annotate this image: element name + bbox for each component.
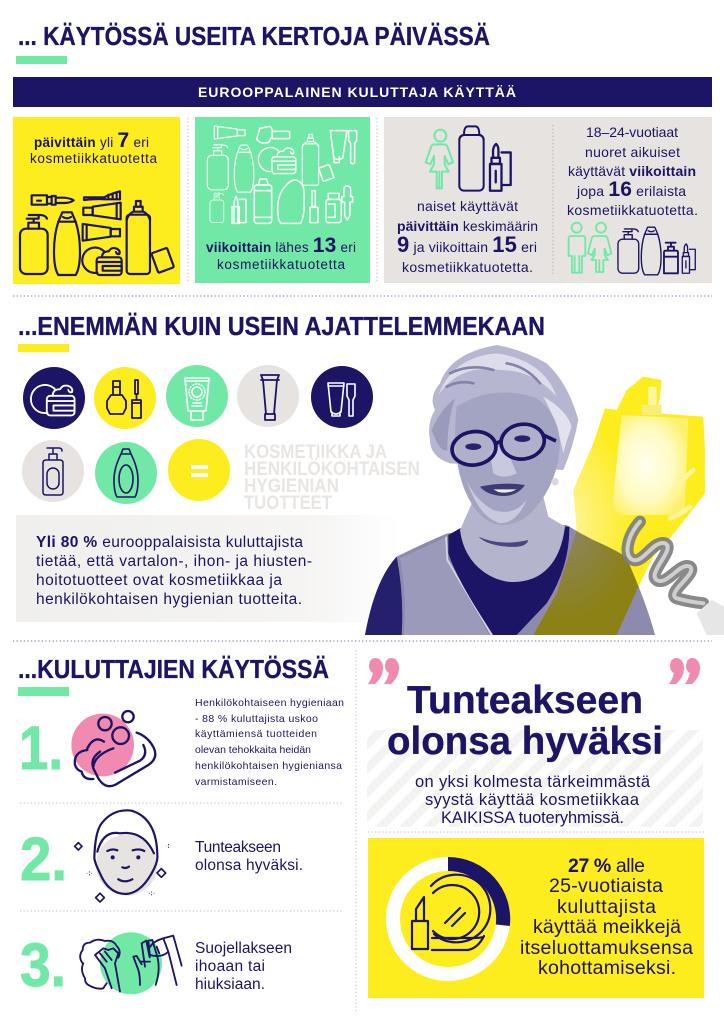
icon: nail polish [94, 367, 156, 429]
panel text: weekly 13 [206, 234, 356, 272]
panel text: daily 7 [30, 129, 157, 166]
panel text: 27 percent: käyttää meikkejä [533, 916, 681, 938]
icon circles row 1 [23, 365, 373, 429]
icon: tube [237, 365, 299, 427]
panel text: women: päivittäin keskimäärin [397, 218, 538, 234]
quote heading: Tunteakseen [407, 679, 643, 722]
panel: women and young adults [384, 117, 712, 283]
panel text: young adults: 18–24-vuotiaat [586, 124, 678, 140]
panel text: women [397, 198, 538, 275]
panel text: women: 9 ja viikoittain 15 eri [397, 232, 537, 257]
panel text: 27 percent: 25-vuotiaista [549, 875, 663, 897]
description 1: olevan tehokkaita heidän [195, 744, 311, 756]
quote text: on yksi kolmesta tärkeimmästä [415, 773, 651, 791]
panel text: daily 7: kosmetiikkatuotetta [30, 151, 157, 166]
striped background [367, 730, 703, 827]
heading accent bar [18, 344, 69, 352]
gray label: cosmetics and personal hygiene products [244, 441, 420, 514]
panel text: 27 percent: 27 % alle [568, 855, 645, 877]
gray label: cosmetics and personal hygiene products: HENKILÖKOHTAISEN [244, 457, 420, 480]
panel text: young adults: nuoret aikuiset [585, 144, 680, 160]
number 3: 3. [20, 931, 66, 999]
gray label: cosmetics and personal hygiene products: HYGIENIAN [244, 475, 339, 497]
quote heading [387, 679, 663, 763]
icon: cream jar [23, 367, 85, 429]
title: ... KÄYTÖSSÄ USEITA KERTOJA PÄIVÄSSÄ [18, 22, 490, 51]
description 2: Tunteakseen [195, 839, 281, 856]
icons: woman with products [426, 126, 511, 191]
gray label: cosmetics and personal hygiene products: KOSMETIIKKA JA [244, 441, 387, 463]
description 3: ihoaan tai [195, 958, 265, 975]
callout: 80 percent: hoitotuotteet ovat kosmetiikkaa ja [36, 572, 282, 589]
panel text: young adults: käyttävät viikoittain [568, 163, 696, 179]
panel text: 27 percent: kohottamiseksi. [538, 957, 676, 979]
panel: weekly products green [195, 117, 370, 283]
icon: equals sign [168, 439, 230, 501]
banner [13, 77, 712, 107]
panel text: women: kosmetiikkatuotetta. [402, 259, 533, 275]
icon: sunscreen [166, 365, 228, 427]
item 1: personal hygiene [19, 697, 344, 788]
divider [187, 118, 189, 283]
perfume bottle [613, 415, 688, 515]
icon: soap and bubbles [71, 711, 155, 786]
panel text: 27 percent: kuluttajista [557, 896, 656, 918]
quote mark left [368, 658, 399, 684]
description 1: - 88 % kuluttajista uskoo [195, 713, 318, 725]
description 3 [195, 940, 292, 993]
icons: daily cosmetics [20, 191, 174, 275]
callout: 80 percent: tietää, että vartalon-, ihon- ja hiusten- [36, 553, 312, 570]
quote mark right [669, 658, 700, 684]
item 3: protect [20, 931, 292, 999]
panel: daily products yellow [13, 117, 180, 284]
icons: young people with products [569, 223, 695, 275]
description 1: Henkilökohtaiseen hygieniaan [195, 697, 344, 709]
description 1 [195, 697, 344, 788]
divider [13, 640, 712, 642]
panel: 27 percent [368, 838, 704, 998]
donut chart with makeup icon [393, 857, 510, 974]
item 2: feel good [20, 810, 303, 902]
description 3: hiuksiaan. [195, 976, 265, 993]
panel text: 27 percent [520, 855, 693, 979]
icons: weekly cosmetics [207, 126, 357, 223]
panel text: young adults: kosmetiikkatuotetta. [567, 202, 698, 218]
callout: 80 percent [16, 515, 400, 622]
icon: shampoo bottle [95, 442, 157, 504]
quote text [415, 773, 651, 827]
face [455, 392, 560, 525]
callout: 80 percent: henkilökohtaisen hygienian tuotteita. [36, 591, 302, 608]
description 2: olonsa hyväksi. [195, 857, 303, 874]
banner: EUROOPPALAINEN KULUTTAJA KÄYTTÄÄ [198, 84, 516, 100]
quote text: syystä käyttää kosmetiikkaa [425, 791, 640, 809]
heading accent bar [18, 687, 69, 696]
title accent bar [16, 56, 67, 64]
number 2: 2. [20, 825, 67, 893]
panel text: young adults: jopa 16 erilaista [576, 178, 686, 201]
section heading 3: ...KULUTTAJIEN KÄYTÖSSÄ [18, 655, 329, 684]
number 1: 1. [19, 714, 63, 782]
photo: woman with perfume and toothpaste [365, 345, 724, 635]
glasses [450, 421, 556, 468]
icon: toothpaste and toothbrush [311, 366, 373, 428]
panel text: young adults [567, 124, 698, 218]
panel text: weekly 13: kosmetiikkatuotetta [217, 257, 345, 272]
panel text: women: naiset käyttävät [417, 198, 518, 214]
toothpaste squiggle [627, 522, 703, 603]
hair [429, 345, 578, 470]
callout: 80 percent: Yli 80 % eurooppalaisista kuluttajista [36, 534, 303, 551]
panel text: daily 7: päivittäin yli 7 eri [34, 129, 149, 152]
sweater [365, 525, 655, 635]
panel text: 27 percent: itseluottamuksensa [520, 937, 693, 959]
divider [13, 295, 712, 297]
quote panel [367, 658, 703, 827]
quote heading: olonsa hyväksi [387, 720, 663, 763]
divider [376, 118, 378, 283]
section heading 2: ...ENEMMÄN KUIN USEIN AJATTELEMMEKAAN [18, 313, 545, 341]
icon circles row 2 [22, 439, 230, 504]
panel text: weekly 13: viikoittain lähes 13 eri [206, 234, 356, 257]
icon: face [75, 810, 171, 902]
gray label: cosmetics and personal hygiene products: TUOTTEET [244, 492, 332, 514]
icon: washing hands [80, 932, 182, 994]
description 2 [195, 839, 303, 874]
description 1: henkilökohtaisen hygieniansa [195, 760, 342, 772]
icon: pump bottle [22, 440, 84, 502]
dark top [448, 527, 569, 635]
description 1: varmistamiseen. [195, 776, 277, 788]
neck and chest [460, 497, 565, 582]
description 3: Suojellakseen [195, 940, 292, 957]
description 1: käyttämiensä tuotteiden [195, 728, 317, 740]
quote text: KAIKISSA tuoteryhmissä. [441, 809, 624, 827]
perfume hand yellow [533, 377, 705, 635]
